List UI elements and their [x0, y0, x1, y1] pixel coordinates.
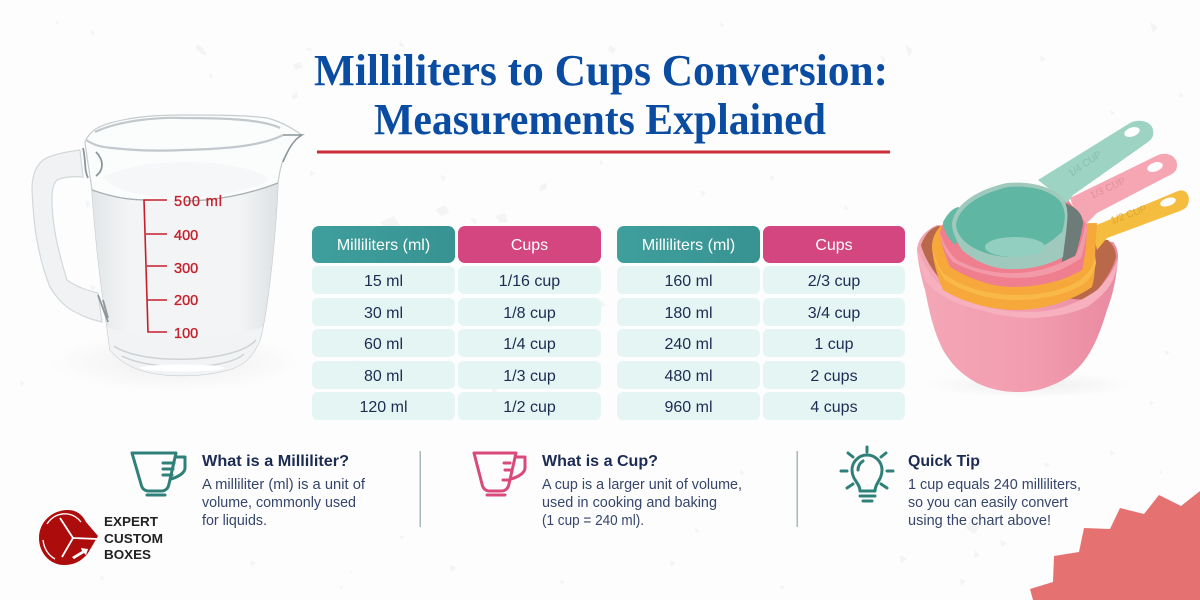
row 5: 120 ml [359, 399, 408, 416]
illustration: nested measuring cups [917, 121, 1189, 398]
row 2 [312, 298, 601, 326]
text: (1 cup = 240 ml). [542, 513, 644, 529]
logo text: BOXES [104, 547, 151, 562]
illustration: nested measuring cups: 1/4 CUP [1067, 149, 1104, 179]
pink cup handle [1070, 154, 1177, 240]
text: for liquids. [202, 513, 267, 529]
header: milliliters: Milliliters (ml) [337, 237, 430, 254]
bowl front rim [917, 250, 1118, 318]
jug rim [86, 118, 283, 151]
logo mark [39, 510, 98, 565]
header: milliliters [617, 226, 760, 263]
row 3 [312, 329, 601, 357]
row 1: 1/16 cup [499, 273, 560, 290]
row 2: 3/4 cup [808, 305, 860, 322]
table: right [617, 226, 905, 420]
row 2 [617, 298, 905, 326]
row 3: 240 ml [664, 336, 713, 353]
icon: pink measuring cup [474, 453, 525, 495]
row 1 [617, 266, 905, 294]
dark interior behind green cup [1062, 203, 1083, 262]
row 5 [312, 392, 601, 420]
row 4 [312, 361, 601, 389]
title: Measurements Explained [374, 95, 826, 144]
divider [420, 451, 421, 527]
row 1: 2/3 cup [808, 273, 860, 290]
row 3: 1 cup [814, 336, 854, 353]
row 3 [617, 329, 905, 357]
text: using the chart above! [908, 513, 1051, 529]
bowl interior [921, 226, 1116, 300]
yellow cup handle [1092, 190, 1189, 250]
illustration: nested measuring cups: 1/3 CUP [1089, 176, 1128, 202]
jug body [85, 115, 302, 375]
green cup interior [956, 187, 1065, 257]
row 1: 160 ml [664, 273, 713, 290]
table: left [312, 226, 601, 420]
large pink bowl [917, 225, 1118, 392]
jug scale: 200 [174, 293, 198, 309]
row 4: 480 ml [664, 368, 713, 385]
title underline [317, 150, 890, 154]
row 4: 2 cups [810, 368, 858, 385]
green cup body [952, 183, 1067, 269]
jug scale: 500 ml [174, 194, 222, 210]
text: Quick Tip [908, 453, 980, 470]
jug scale [144, 194, 222, 342]
text: What is a Milliliter? [202, 453, 349, 470]
text: What is a Cup? [542, 453, 658, 470]
logo text: EXPERT [104, 514, 158, 529]
text [908, 453, 1081, 529]
green crescent behind [943, 207, 975, 245]
title [314, 46, 888, 144]
info: quick tip [841, 447, 1081, 529]
illustration: nested measuring cups: 1/2 CUP [1109, 203, 1149, 227]
yellow cup rim [932, 247, 1096, 300]
yellow cup [932, 223, 1097, 310]
row 3: 60 ml [364, 336, 403, 353]
text: so you can easily convert [908, 495, 1068, 511]
row 4 [617, 361, 905, 389]
row 5: 4 cups [810, 399, 858, 416]
jug scale: 100 [174, 326, 198, 342]
title: Milliliters to Cups Conversion: [314, 46, 888, 95]
jug scale: 300 [174, 261, 198, 277]
logo text: CUSTOM [104, 531, 163, 546]
pink cup [940, 200, 1087, 287]
row 3: 1/4 cup [503, 336, 556, 353]
jug back water surface [103, 162, 268, 198]
green cup handle [1038, 121, 1153, 203]
jug scale: 400 [174, 228, 198, 244]
row 2: 1/8 cup [503, 305, 556, 322]
logo: Expert Custom Boxes [39, 510, 163, 565]
header: cups: Cups [511, 237, 548, 254]
row 2: 180 ml [664, 305, 713, 322]
illustration: glass measuring jug [32, 115, 302, 392]
decoration: coral starburst corner [1030, 491, 1200, 600]
row 4: 1/3 cup [503, 368, 556, 385]
text [542, 453, 742, 529]
logo text [104, 514, 163, 562]
header: cups: Cups [815, 237, 853, 254]
divider [796, 451, 798, 527]
info: what is a cup [474, 453, 742, 529]
row 1: 15 ml [364, 273, 403, 290]
text: 1 cup equals 240 milliliters, [908, 477, 1081, 493]
row 2: 30 ml [364, 305, 403, 322]
text [202, 453, 366, 529]
jug base [107, 327, 263, 375]
info: what is a milliliter [132, 453, 366, 529]
row 5: 1/2 cup [503, 399, 556, 416]
pink cup rim [940, 220, 1087, 278]
row 5 [617, 392, 905, 420]
header: milliliters [312, 226, 455, 263]
row 5: 960 ml [664, 399, 713, 416]
jug water [92, 183, 278, 336]
row 4: 80 ml [364, 368, 403, 385]
header: cups [458, 226, 601, 263]
text: volume, commonly used [202, 495, 356, 511]
text: used in cooking and baking [542, 495, 717, 511]
header: milliliters: Milliliters (ml) [642, 237, 735, 254]
icon: light bulb [841, 447, 893, 501]
header: cups [763, 226, 905, 263]
icon: teal measuring cup [132, 453, 185, 495]
text: A milliliter (ml) is a unit of [202, 477, 366, 493]
row 1 [312, 266, 601, 294]
jug handle [32, 150, 102, 322]
text: A cup is a larger unit of volume, [542, 477, 742, 493]
